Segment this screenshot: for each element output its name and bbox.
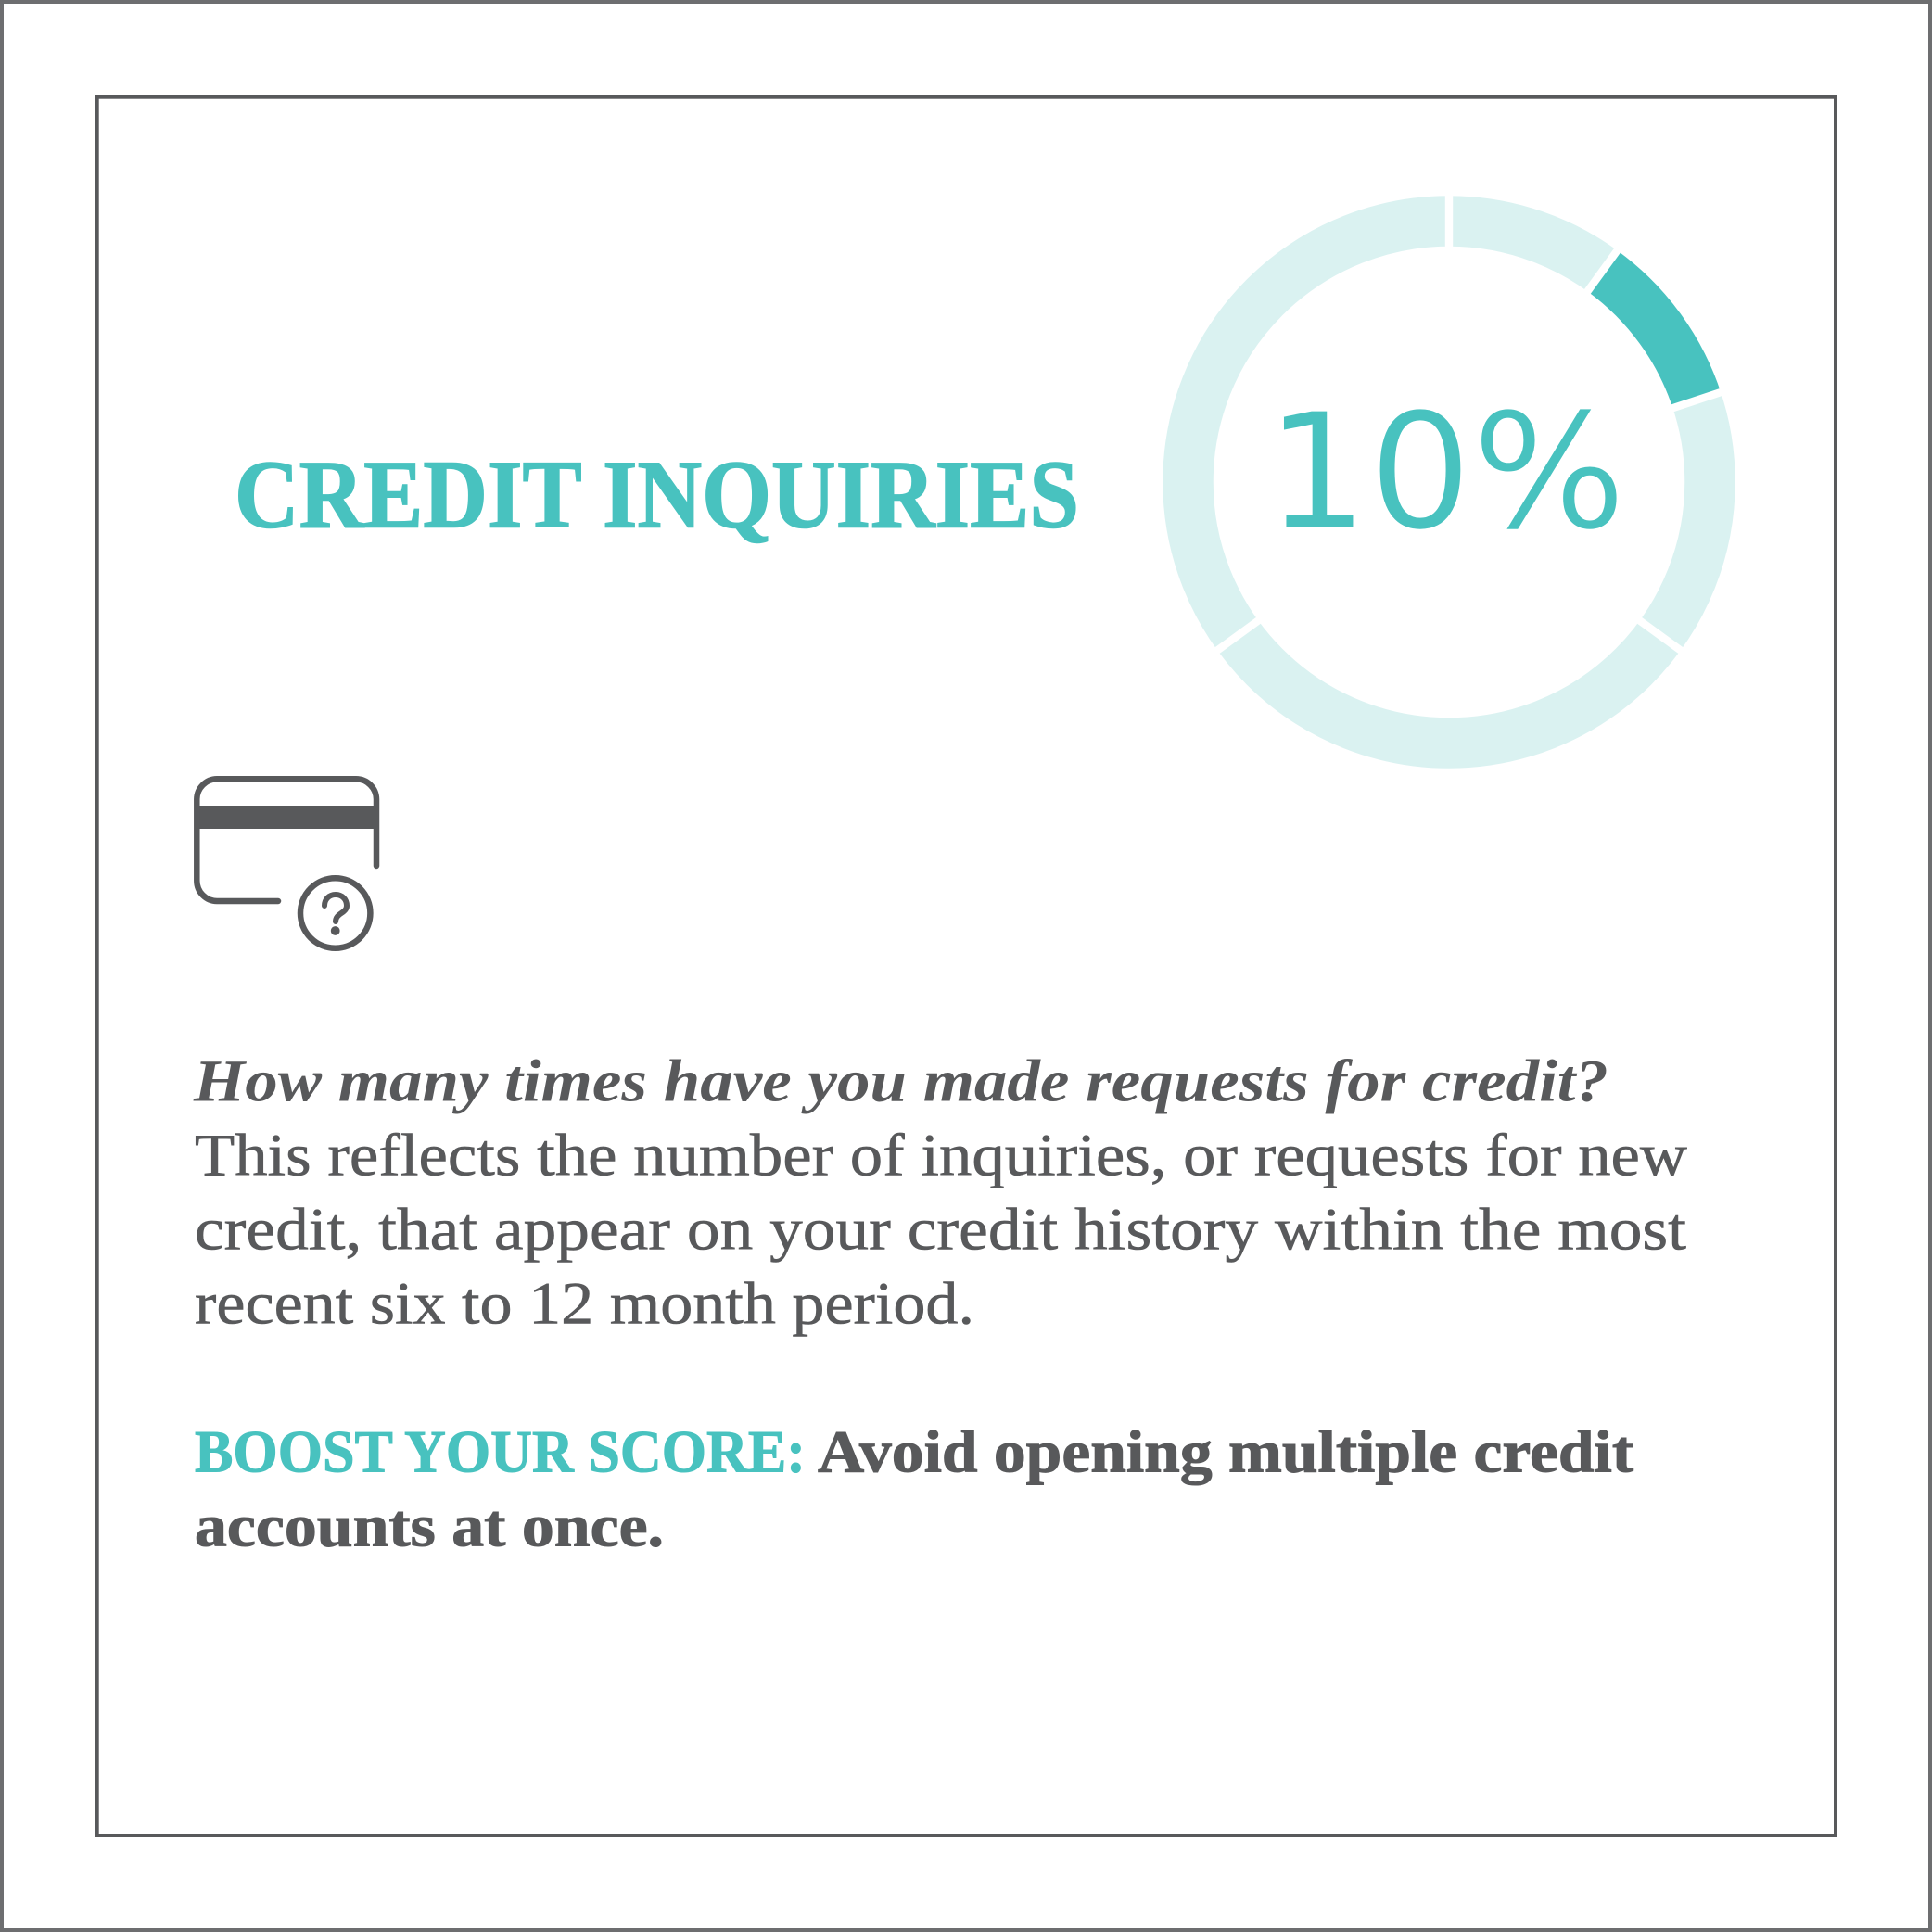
description: recent six to 12 month period. bbox=[195, 1270, 974, 1337]
boost your score callout bbox=[195, 1418, 1633, 1559]
body text bbox=[193, 1048, 1687, 1337]
question line: How many times have you made requests for credit? bbox=[193, 1048, 1608, 1114]
title: CREDIT INQUIRIES bbox=[235, 440, 1079, 549]
callout advice: Avoid opening multiple credit bbox=[818, 1418, 1633, 1485]
donut track bbox=[1188, 221, 1710, 744]
callout advice bbox=[195, 1418, 1633, 1559]
percentage value: 10% bbox=[1265, 378, 1626, 566]
callout advice: accounts at once. bbox=[195, 1493, 664, 1559]
icon: credit card with question mark bbox=[197, 779, 376, 948]
highlighted segment bbox=[1602, 271, 1697, 401]
description: credit, that appear on your credit history within the most bbox=[195, 1196, 1686, 1263]
donut chart: 10 percent bbox=[1188, 181, 1735, 744]
description bbox=[195, 1122, 1687, 1337]
callout label: BOOST YOUR SCORE: bbox=[195, 1418, 806, 1485]
description: This reflects the number of inquiries, or requests for new bbox=[195, 1122, 1687, 1188]
